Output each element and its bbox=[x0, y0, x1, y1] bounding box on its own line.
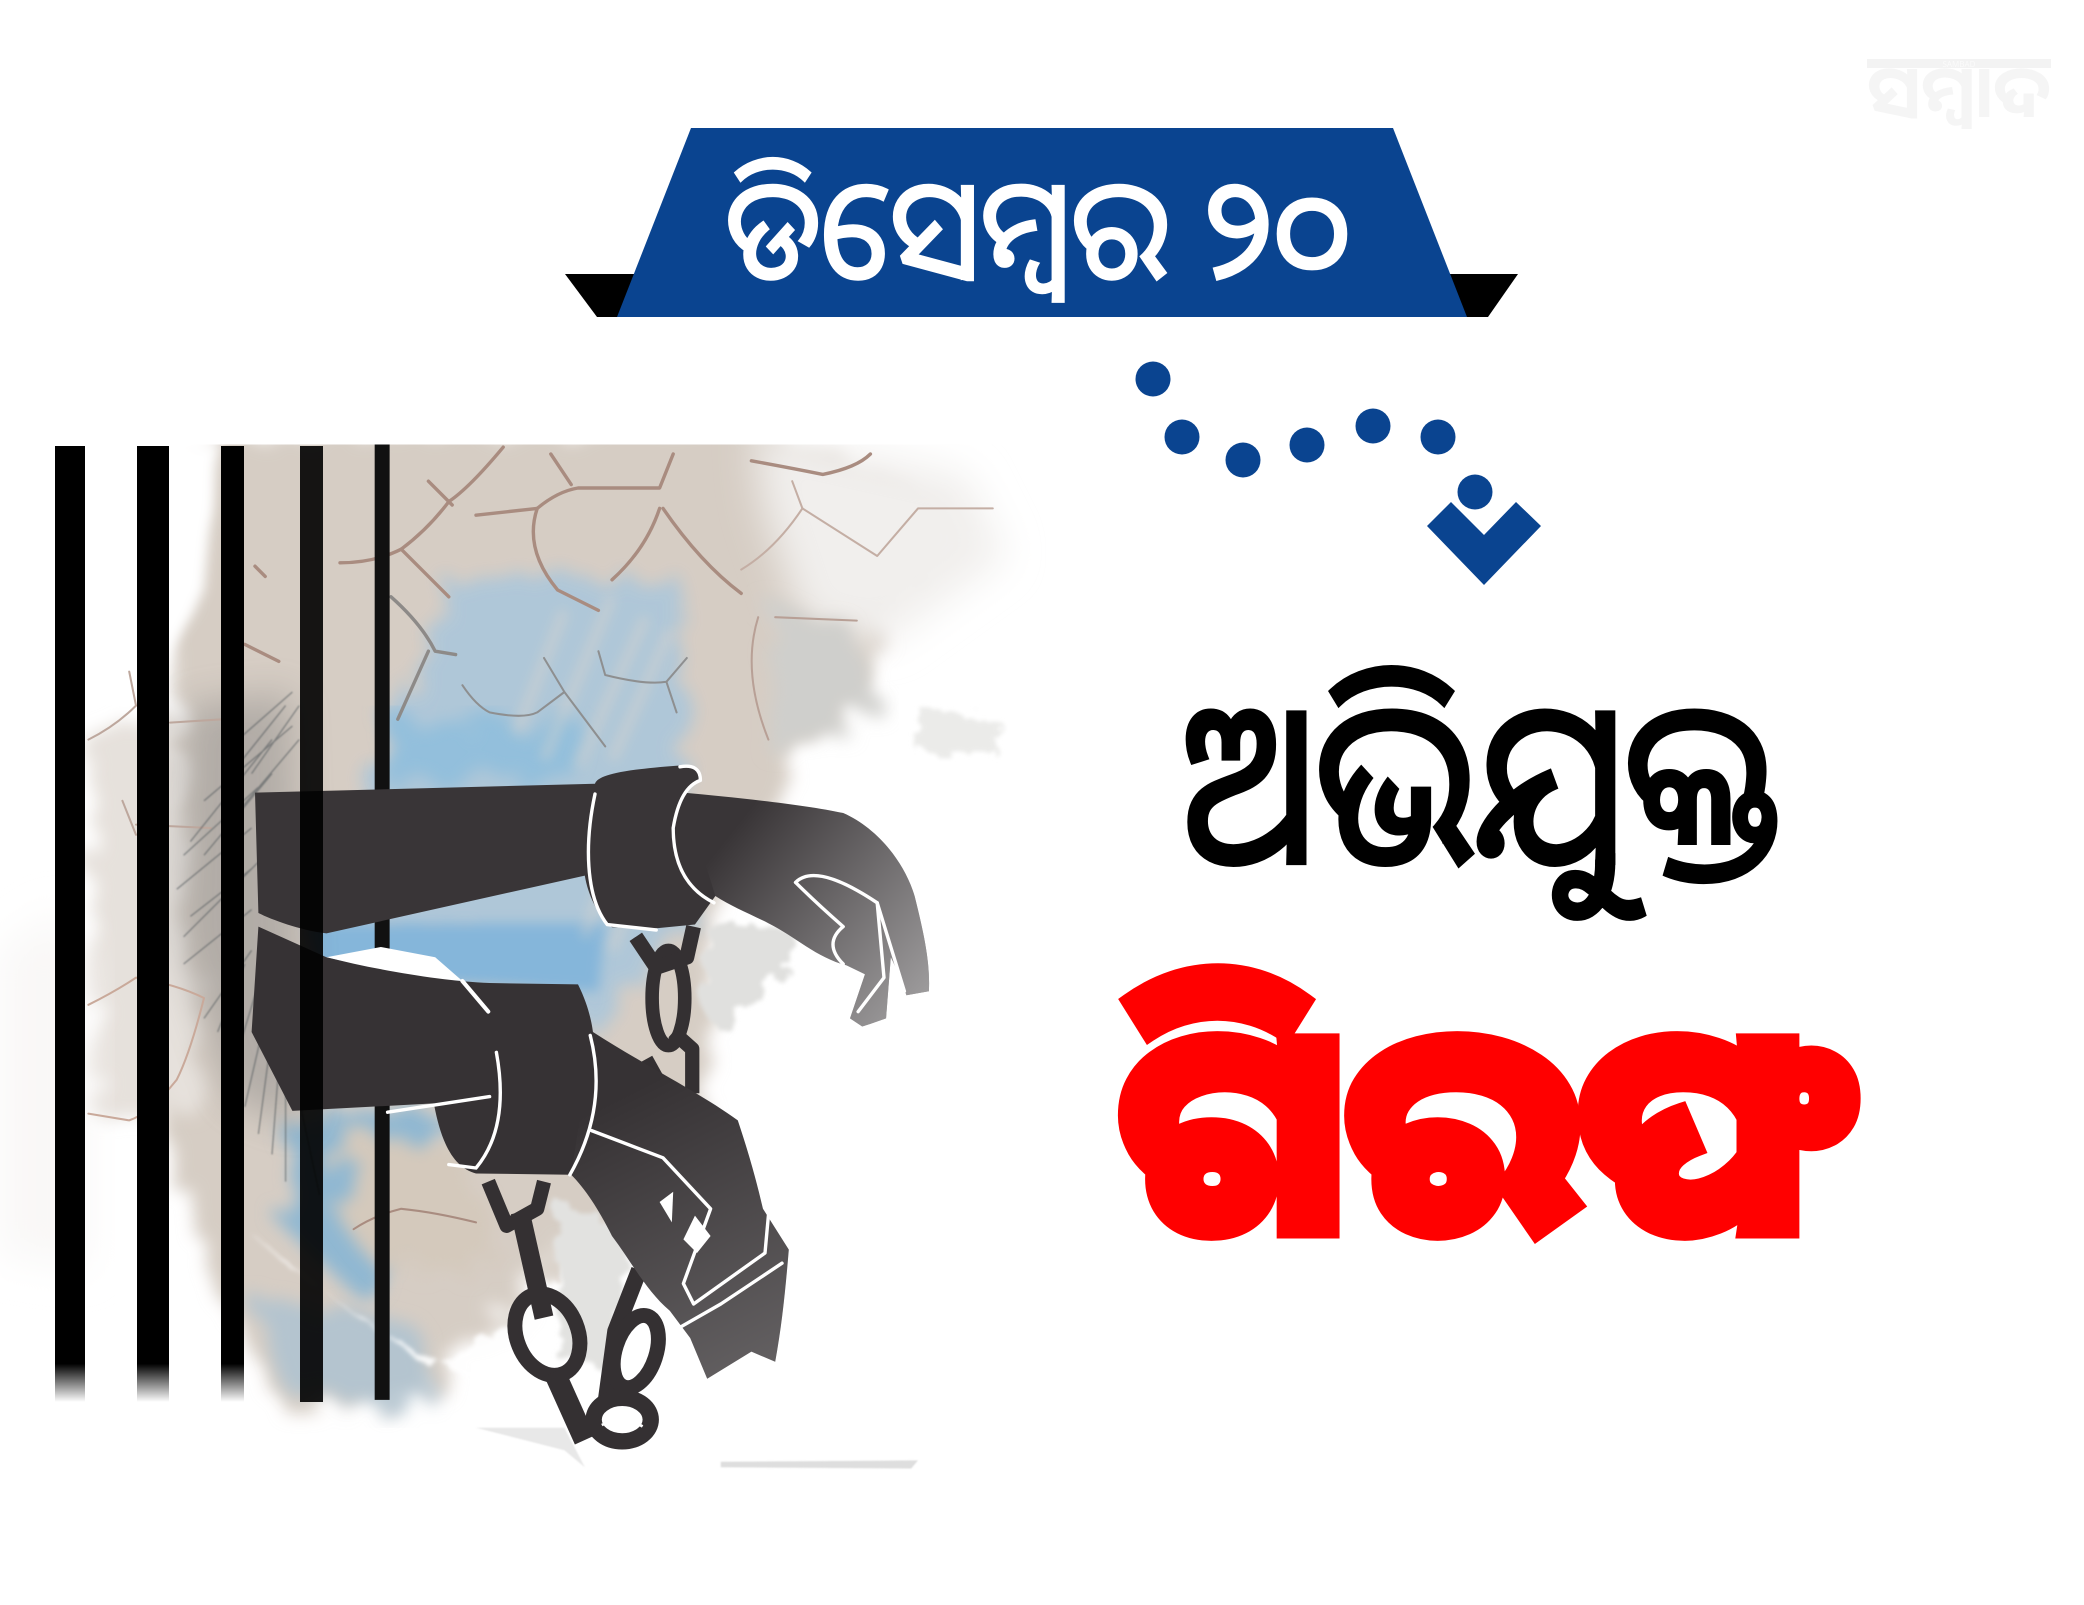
wall cracks bbox=[88, 447, 993, 1229]
date banner bbox=[565, 128, 1518, 319]
illustration: chained hands behind prison bars bbox=[0, 427, 1006, 1469]
bar 5 behind the arms bbox=[375, 444, 390, 1400]
watermark: Sambad logo: ସମ୍ବାଦ bbox=[1867, 40, 2051, 139]
knuckle highlights bbox=[660, 1192, 673, 1222]
upper arm white contours bbox=[588, 766, 904, 1012]
banner ribbon fold right bbox=[1450, 274, 1518, 317]
watercolor background bbox=[0, 427, 1006, 1420]
dotted arrow bbox=[1136, 362, 1541, 585]
headline: arrested: ଗିରଫ bbox=[1119, 922, 1855, 1316]
upper chain bbox=[636, 927, 694, 1093]
headline: accused: ଅଭିଯୁକ୍ତ bbox=[1183, 622, 1781, 929]
lower arm and hand bbox=[252, 927, 789, 1379]
floor shadow bbox=[476, 1428, 918, 1469]
lower chain bbox=[488, 1182, 667, 1441]
upper arm and hand bbox=[255, 765, 929, 1027]
prison bars bbox=[55, 446, 323, 1402]
hair strokes bbox=[176, 691, 300, 1182]
white paper scrap above lower arm bbox=[326, 947, 462, 981]
watermark: Sambad logo: SAMBAD bbox=[1943, 59, 1976, 70]
banner trapezoid bbox=[617, 128, 1467, 317]
banner ribbon fold left bbox=[565, 274, 640, 317]
banner date text: ଡିସେମ୍ବର ୨୦ bbox=[725, 130, 1349, 319]
lower arm white contours bbox=[388, 981, 782, 1352]
